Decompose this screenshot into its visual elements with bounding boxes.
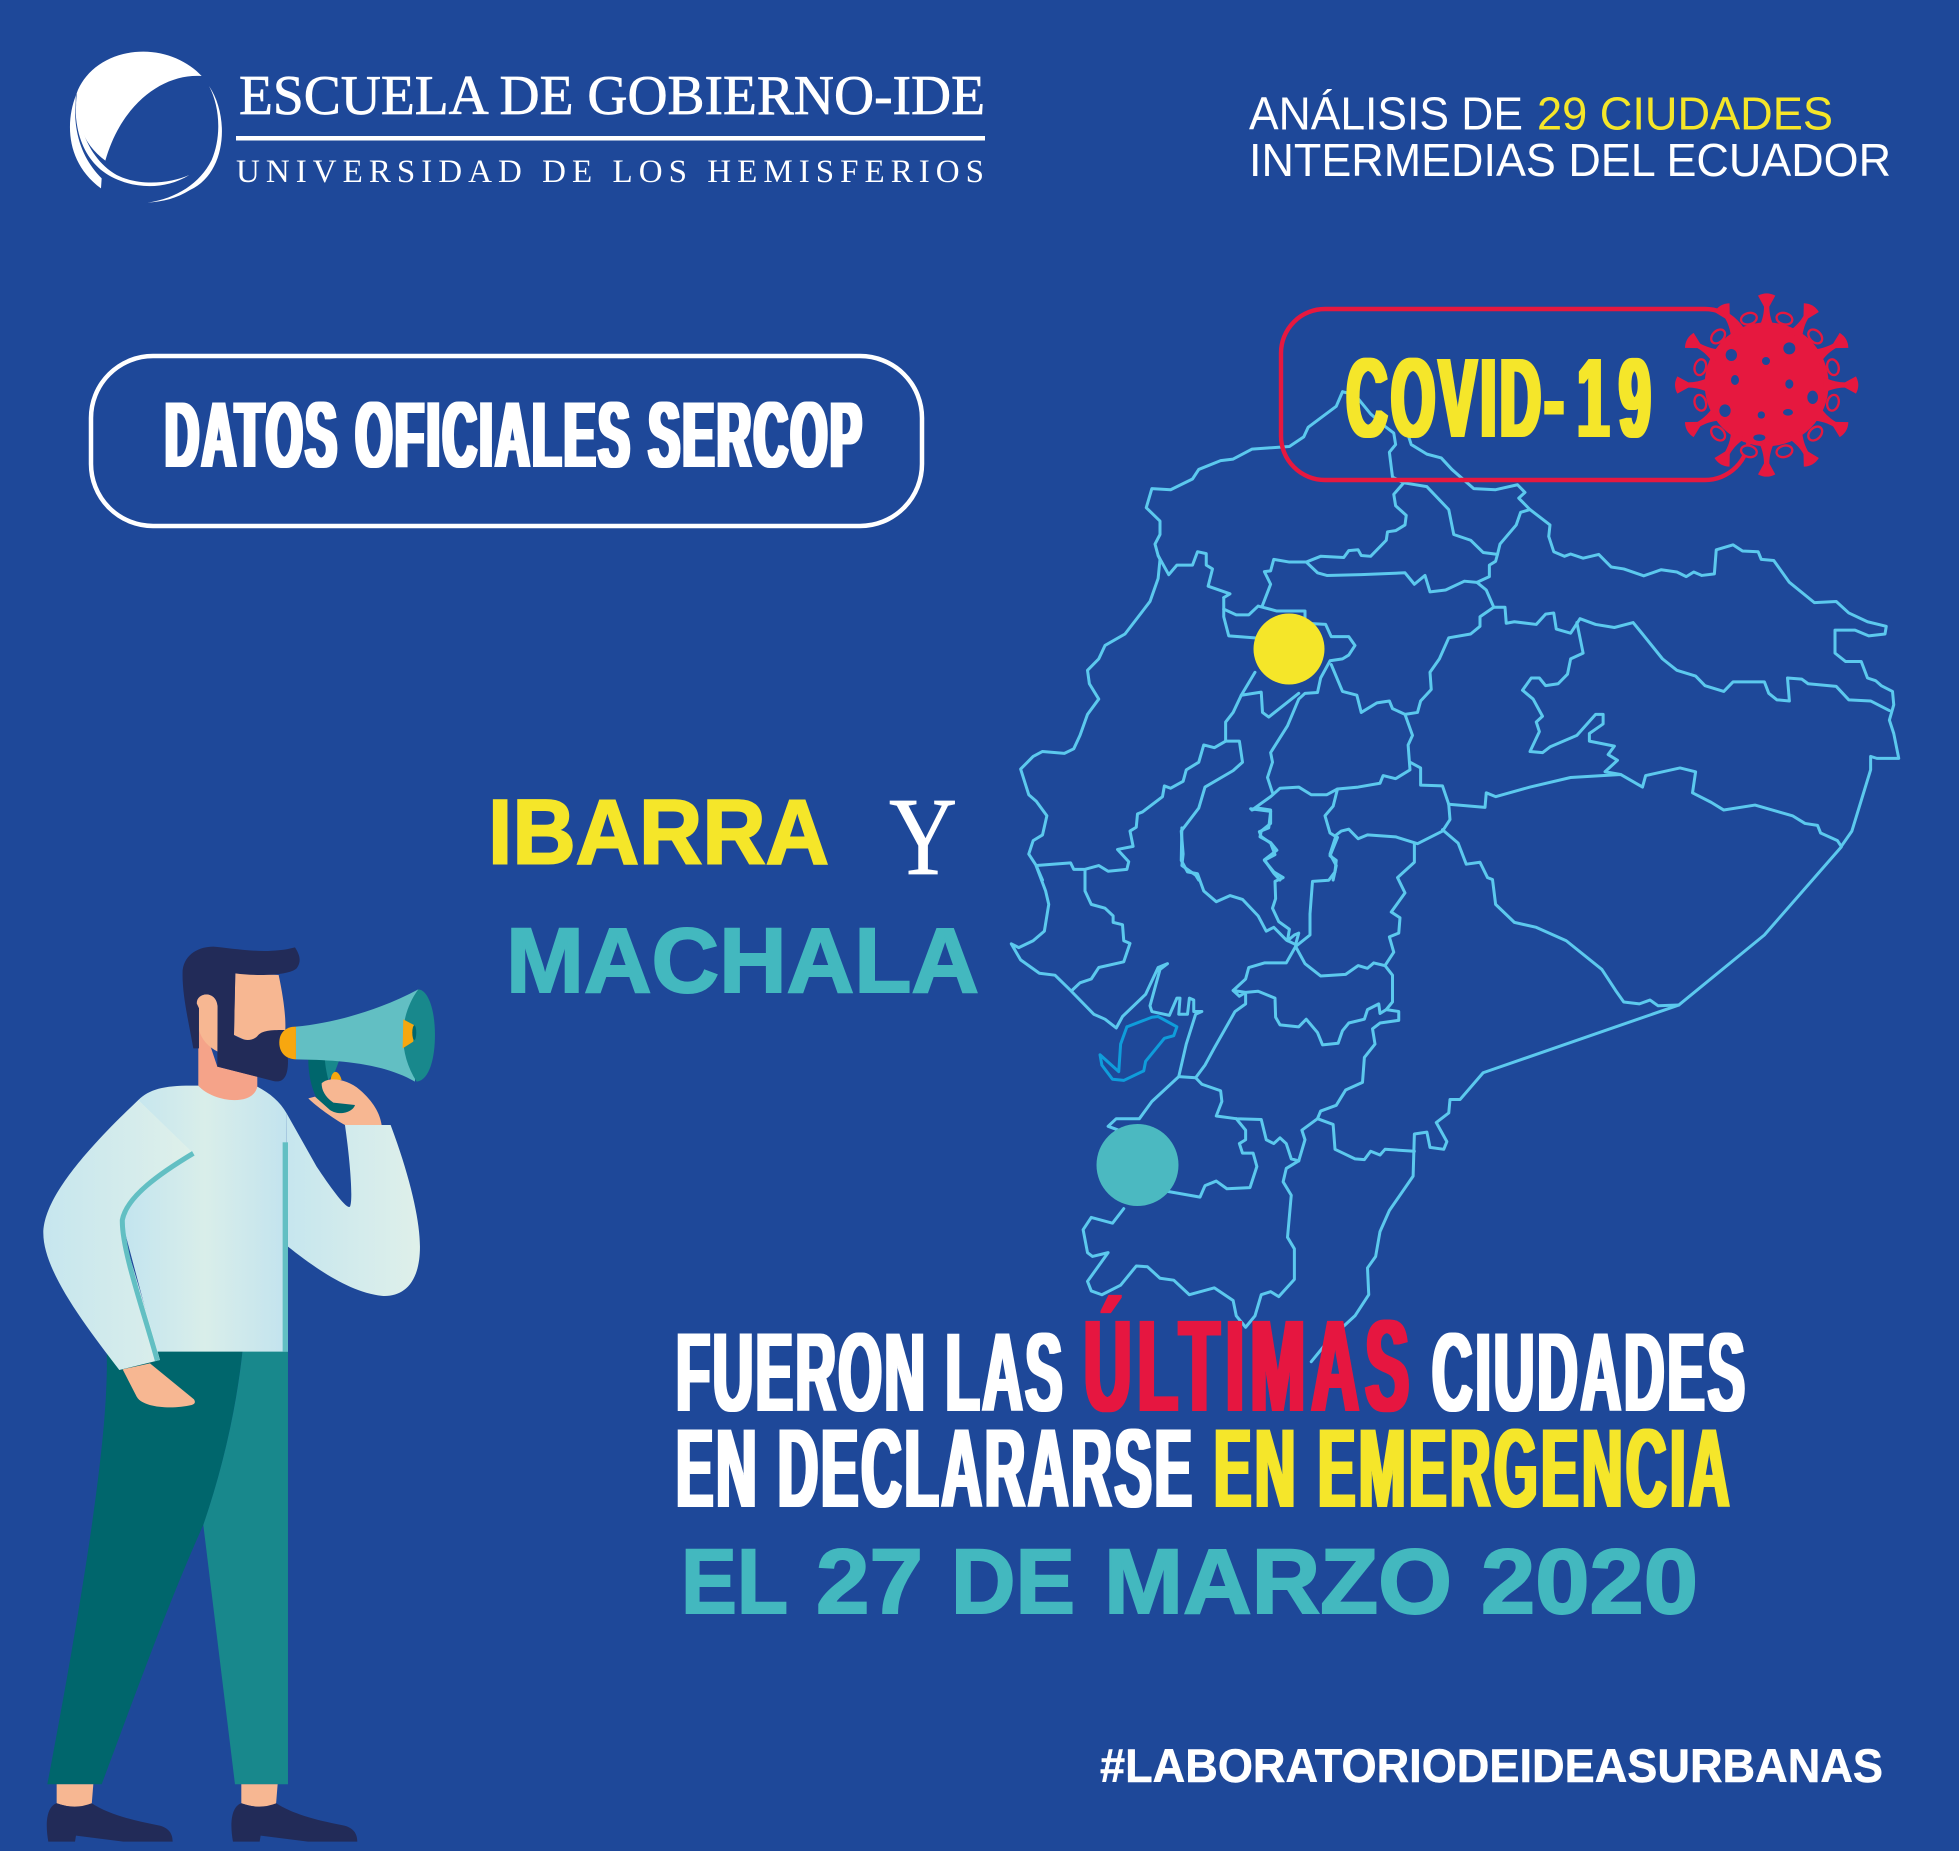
headline date: EL — [681, 1531, 788, 1633]
map marker: Machala — [1096, 1124, 1178, 1206]
logo university: UNIVERSIDAD DE LOS HEMISFERIOS — [236, 154, 984, 190]
panel: datos oficiales — [91, 356, 922, 526]
map of Ecuador — [1011, 392, 1899, 1362]
city label: Ibarra: IBARRA — [488, 782, 829, 884]
headline date — [681, 1531, 1698, 1633]
city label: Machala: MACHALA — [506, 910, 979, 1012]
header: analysis text — [1249, 88, 1891, 186]
headline line 1: ÚLTIMAS — [1084, 1292, 1409, 1439]
headline line 2: EN DECLARARSE — [676, 1406, 1192, 1531]
upper body, head, megaphone — [43, 947, 435, 1370]
illustration: man with megaphone — [43, 947, 435, 1842]
header: analysis text: ANÁLISIS DE — [1249, 88, 1523, 140]
headline line 1: CIUDADES — [1432, 1310, 1745, 1435]
headline date: 27 — [816, 1531, 923, 1633]
heading: covid-19: COVID- — [1346, 335, 1564, 461]
logo name: ESCUELA DE GOBIERNO-IDE — [239, 65, 985, 127]
headline line 2: EN EMERGENCIA — [1214, 1406, 1730, 1531]
logo icon — [70, 52, 222, 203]
hashtag: #LABORATORIODEIDEASURBANAS — [1100, 1739, 1883, 1792]
headline line 1: FUERON LAS — [676, 1310, 1062, 1435]
headline date: MARZO — [1104, 1531, 1452, 1633]
headline line 1 — [676, 1292, 1745, 1439]
headline date: DE — [951, 1531, 1075, 1633]
city connector: Y: Y — [889, 776, 957, 899]
header: analysis text: INTERMEDIAS DEL ECUADOR — [1249, 134, 1891, 186]
headline date: 2020 — [1481, 1531, 1698, 1633]
legs and shoes — [47, 1350, 357, 1842]
logo rule — [236, 136, 985, 140]
map marker: Ibarra — [1254, 614, 1324, 684]
heading: covid-19: 19 — [1578, 335, 1650, 461]
header: analysis text: 29 CIUDADES — [1537, 88, 1833, 140]
icon: virus — [1675, 293, 1858, 477]
heading: datos oficiales: DATOS OFICIALES SERCOP — [165, 382, 862, 487]
panel: covid label — [1281, 309, 1749, 480]
headline line 2 — [676, 1406, 1730, 1531]
